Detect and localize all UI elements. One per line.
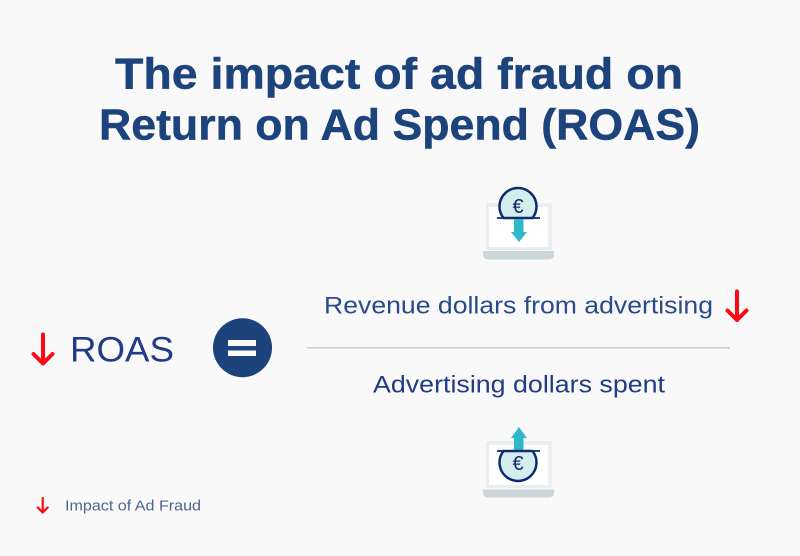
title: Return on Ad Spend (ROAS): [99, 100, 700, 150]
icon: laptop with coin going out: [483, 427, 554, 498]
icon: laptop with coin going in: €: [512, 196, 524, 218]
ROAS label: ROAS: [70, 331, 174, 370]
fraction line: [307, 347, 730, 349]
denominator text: Advertising dollars spent: [373, 372, 665, 399]
icon: red down arrow beside revenue: [728, 292, 746, 320]
legend: [38, 498, 201, 515]
icon: equals sign in circle: [213, 318, 272, 377]
legend arrow: [38, 498, 48, 512]
title: The impact of ad fraud on: [115, 50, 683, 98]
icon: laptop with coin going in: [483, 188, 554, 260]
icon: laptop with coin going out: €: [512, 453, 524, 475]
icon: red down arrow beside ROAS: [34, 334, 52, 364]
legend label: Impact of Ad Fraud: [65, 499, 201, 515]
numerator text: Revenue dollars from advertising: [324, 292, 713, 320]
title: [99, 50, 700, 150]
